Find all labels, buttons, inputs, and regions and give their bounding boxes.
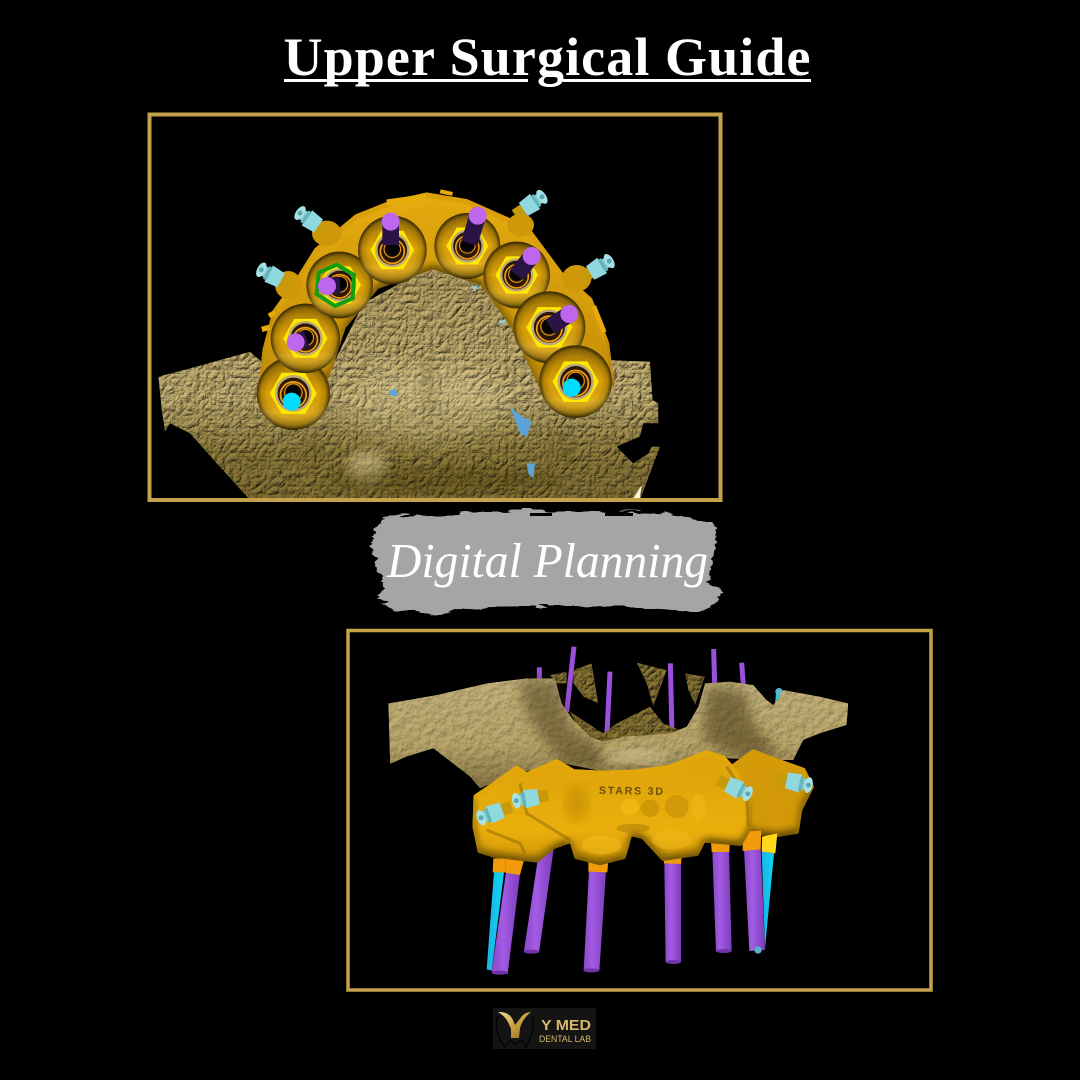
labels embossed on guide [261,189,607,333]
bone shading [518,680,780,770]
logo background [493,1008,596,1049]
purple implants with orange collars [492,831,765,975]
purple pins above bone [539,647,743,740]
surgical guide body [260,195,612,397]
cyan implant tips [283,379,581,411]
bone fragments [550,663,705,747]
title: Upper Surgical Guide [284,27,810,87]
lower bone model [388,678,848,788]
logo text: Y MED [541,1018,591,1034]
upper panel image [158,187,660,500]
logo text: DENTAL LAB [539,1034,591,1044]
embossed text on guide: STARS 3D [599,785,663,798]
lower panel image [388,647,848,975]
purple implant tips [287,207,578,351]
brush streaks [420,513,646,613]
green highlighted sleeve [317,265,354,306]
back guide lobes [723,752,812,835]
logo: Y MED Dental Lab [493,1008,596,1049]
logo text [539,1018,591,1044]
panel: upper arch occlusal view [150,114,720,500]
logo mark [497,1012,533,1047]
left cyan implant [487,858,506,971]
fixation pin stems and pins [253,187,618,299]
brush stroke [371,511,724,614]
digital planning banner [371,511,724,614]
implant shafts [296,216,569,342]
banner label: Digital Planning [386,533,708,588]
right yellow sleeve and cyan implant [762,833,777,948]
implant tip dot [754,946,762,954]
lower surgical guide body [475,753,750,863]
upper bone model [158,267,660,500]
guide surface bumps [487,767,748,854]
lower panel frame [348,630,931,990]
panel: frontal view of guide [348,630,931,990]
upper panel frame [150,114,720,500]
cyan pin above bone [775,688,783,705]
implant sleeves (rings) [257,213,612,430]
fixation pins [474,769,814,828]
